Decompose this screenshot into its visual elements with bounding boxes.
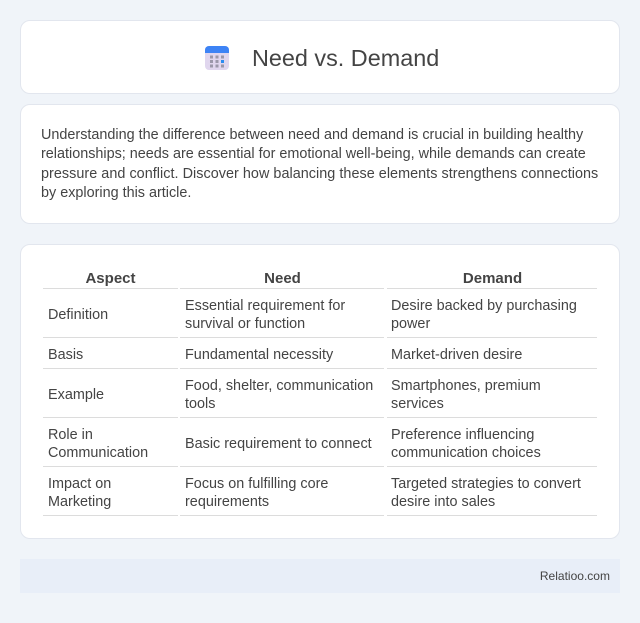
- row: example: [48, 378, 541, 412]
- row: role in communication: communication choices: [391, 445, 541, 461]
- row: impact on marketing: requirements: [185, 494, 269, 510]
- intro text: pressure and conflict. Discover how balancing these elements strengthens connections: [41, 166, 598, 182]
- row: impact on marketing: [48, 476, 581, 510]
- row: definition: Essential requirement for: [185, 298, 345, 314]
- column headings: Aspect: [85, 270, 136, 287]
- row: basis: Market-driven desire: [391, 347, 522, 363]
- row: impact on marketing: Impact on: [48, 476, 111, 492]
- column headings: [85, 270, 522, 287]
- row: impact on marketing: desire into sales: [391, 494, 495, 510]
- row: definition: Desire backed by purchasing: [391, 298, 577, 314]
- row: role in communication: Role in: [48, 427, 93, 443]
- intro text: [41, 127, 598, 201]
- column headings: Demand: [463, 270, 522, 287]
- row: definition: [48, 298, 577, 332]
- row: example: tools: [185, 396, 215, 412]
- row: basis: [48, 347, 522, 363]
- row: role in communication: Preference influencing: [391, 427, 534, 443]
- row: role in communication: Basic requirement to connect: [185, 436, 372, 452]
- footer bar: [20, 559, 620, 593]
- row: example: Smartphones, premium: [391, 378, 541, 394]
- row: role in communication: Communication: [48, 445, 148, 461]
- header card: [20, 20, 620, 94]
- footer credit: Relatioo.com: [540, 569, 610, 583]
- row: example: Example: [48, 387, 104, 403]
- row: impact on marketing: Targeted strategies to convert: [391, 476, 581, 492]
- icon: calendar: [205, 46, 229, 70]
- intro text: Understanding the difference between need and demand is crucial in building healthy: [41, 127, 583, 143]
- row: definition: power: [391, 316, 430, 332]
- row: example: Food, shelter, communication: [185, 378, 373, 394]
- row: example: services: [391, 396, 444, 412]
- column headings: Need: [264, 270, 301, 287]
- row: role in communication: [48, 427, 541, 461]
- row: definition: Definition: [48, 307, 108, 323]
- intro text: relationships; needs are essential for emotional well-being, while demands can create: [41, 146, 586, 162]
- table card: [20, 244, 620, 539]
- row: impact on marketing: Focus on fulfilling core: [185, 476, 328, 492]
- title: Need vs. Demand: [252, 45, 439, 71]
- intro text: by exploring this article.: [41, 185, 191, 201]
- row: basis: Basis: [48, 347, 83, 363]
- row: definition: survival or function: [185, 316, 305, 332]
- row: impact on marketing: Marketing: [48, 494, 111, 510]
- intro card: [20, 104, 620, 224]
- row: basis: Fundamental necessity: [185, 347, 333, 363]
